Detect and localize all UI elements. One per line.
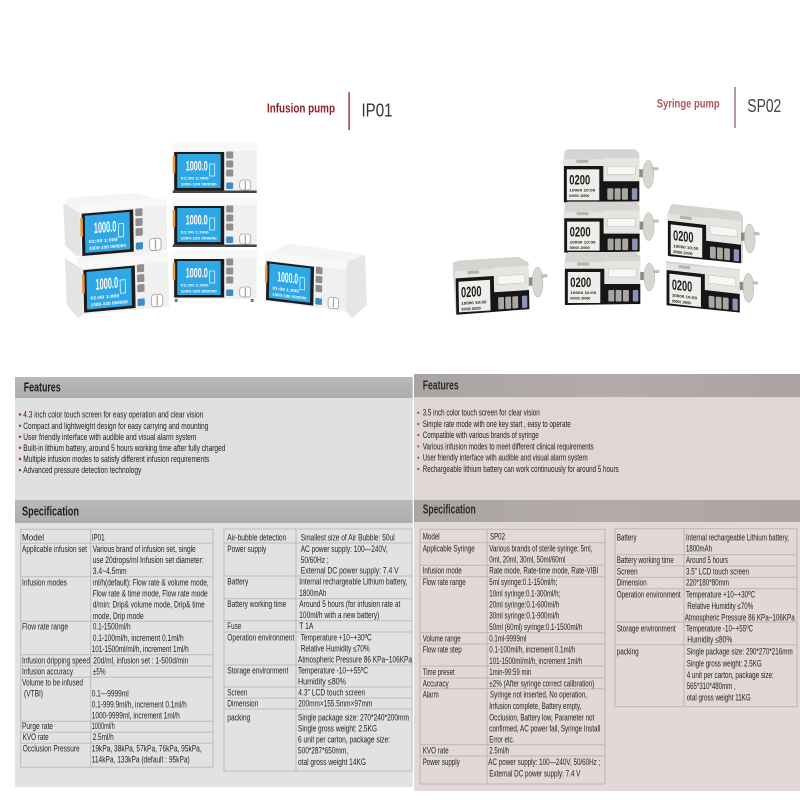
table: IP01 left: Model bbox=[22, 532, 44, 542]
table: IP01 right: Screen bbox=[227, 688, 247, 698]
table: SP02 right: Single gross weight: 2.5KG bbox=[687, 658, 762, 668]
table: SP02 left: confirmed, AC power fail, Syringe Install bbox=[489, 724, 600, 734]
table: SP02 right bbox=[615, 529, 797, 707]
table: SP02 left: 0ml, 20ml, 30ml, 50ml/60ml bbox=[489, 554, 565, 564]
table: IP01 left: 114kPa, 133kPa (default : 95kPa) bbox=[92, 755, 190, 765]
syringe pump: centre bottom: 0200 bbox=[570, 274, 591, 290]
table: IP01 right: 6 unit per carton, package size: bbox=[298, 735, 390, 745]
table: IP01 left: Flow rate range bbox=[22, 622, 68, 632]
pump: left lower: 1000.0 bbox=[95, 274, 118, 294]
table: IP01 left: 1000ml/h bbox=[92, 721, 115, 731]
table: IP01 right: Temperature -10~+55ºC bbox=[298, 666, 368, 676]
pump: centre middle: 1000-100 000000 bbox=[181, 236, 218, 240]
pump: left upper: 1000.0 bbox=[94, 219, 117, 237]
pump: centre top: 1000-100 000000 bbox=[181, 182, 218, 186]
table: IP01 left: Infusion modes bbox=[22, 577, 67, 587]
table: IP01 left: Applicable infusion set bbox=[22, 544, 87, 554]
table: IP01 right: 50/60Hz ; bbox=[301, 555, 329, 565]
table: SP02 left: Infusion mode bbox=[423, 566, 462, 576]
table: SP02 left: Syringe not inserted, No operation, bbox=[490, 690, 587, 700]
pump: left lower: 1000-100 000000 bbox=[91, 299, 128, 308]
table: SP02 right: packing bbox=[617, 647, 639, 657]
heading: specification: Specification bbox=[423, 502, 476, 516]
pump: right angled bbox=[265, 243, 367, 318]
table: SP02 left: 5ml syringe:0.1-150ml/h; bbox=[489, 577, 557, 587]
title: infusion pump IP01 bbox=[267, 92, 392, 130]
syringe pump: right lower: 00000 J0000 bbox=[672, 299, 691, 306]
table: IP01 left: 0.1---9999ml bbox=[92, 689, 129, 699]
table: IP01 left: 1000-9999ml, increment 1ml/h bbox=[92, 710, 180, 720]
table: SP02 right: Around 5 hours bbox=[686, 555, 728, 565]
table: SP02 left: Various brands of sterile syringe: 5ml, bbox=[489, 543, 592, 553]
syringe pump: right upper: 10000 10:00 bbox=[673, 244, 698, 251]
title: infusion pump IP01: Infusion pump bbox=[267, 102, 335, 116]
table: SP02 right: 220*180*80mm bbox=[686, 578, 729, 588]
table: IP01 right: Dimension bbox=[227, 699, 258, 709]
pump: centre middle: 01:00 1:000 bbox=[181, 229, 210, 234]
table: SP02 right: 1800mAh bbox=[686, 544, 712, 554]
pump: centre bottom bbox=[173, 250, 257, 302]
table: SP02 left: Infusion complete, Battery empty, bbox=[489, 701, 581, 711]
feature list: Rechargeable lithium battery can work continuously for around 5 hours bbox=[423, 464, 619, 475]
table: SP02 left: Applicable Syringe bbox=[423, 543, 475, 553]
table: IP01 right: Around 5 hours (for infusion rate at bbox=[299, 599, 401, 609]
table: SP02 left: SP02 bbox=[490, 532, 505, 542]
table: IP01 right: Battery working time bbox=[227, 599, 286, 609]
title: syringe pump SP02: SP02 bbox=[747, 96, 781, 116]
table: IP01 right: External DC power supply: 7.4 V bbox=[301, 566, 399, 576]
heading: features: Features bbox=[24, 380, 61, 394]
table: SP02 right: Humidity ≤80% bbox=[687, 634, 732, 644]
table: SP02 right: Temperature -10~+55ºC bbox=[686, 623, 753, 633]
syringe pump: centre bottom: 10000 10:00 bbox=[570, 291, 596, 295]
table: IP01 right: Battery bbox=[227, 577, 249, 587]
pump: centre bottom: 1000.0 bbox=[186, 265, 208, 281]
table: IP01 left: IP01 bbox=[92, 532, 105, 542]
table: SP02 left: AC power supply: 100—240V, 50/60Hz ; bbox=[488, 757, 600, 767]
table: IP01 left: 20d/ml, infusion set : 1-500d/min bbox=[93, 655, 188, 665]
table: IP01 left: Flow rate & time mode, Flow rate mode bbox=[93, 589, 208, 599]
table: SP02 left: 10ml syringe:0.1-300ml/h; bbox=[489, 588, 560, 598]
table: IP01 left: Volume to be infused bbox=[22, 677, 83, 687]
syringe pump: centre middle: 00000 J0000 bbox=[570, 246, 590, 250]
table: SP02 left: Error etc. bbox=[489, 734, 514, 744]
table: IP01 right: Atmospheric Pressure 86 KPa~106KPa bbox=[298, 654, 412, 664]
table: SP02 left: Volume range bbox=[423, 633, 461, 643]
table: SP02 left: Occlusion, Battery low, Parameter not bbox=[489, 712, 595, 722]
syringe pump: centre top: 10000 10:00 bbox=[569, 188, 595, 192]
table: SP02 left bbox=[420, 529, 605, 784]
table: SP02 right: otal gross weight 11KG bbox=[687, 692, 751, 702]
syringe pump: centre middle: 10000 10:00 bbox=[570, 241, 596, 245]
table: IP01 left: 2.5ml/h bbox=[93, 732, 114, 742]
table: SP02 left: Alarm bbox=[423, 690, 439, 700]
table: IP01 left bbox=[21, 529, 213, 767]
table: SP02 left: 50ml (60ml) syringe:0.1-1500ml/h bbox=[489, 622, 582, 632]
feature list: User friendly interface with audible and visual alarm system bbox=[23, 432, 196, 443]
syringe pump: right upper: 00000 J0000 bbox=[673, 250, 693, 256]
table: SP02 right: Battery bbox=[617, 533, 637, 543]
table: SP02 right: 3.5" LCD touch screen bbox=[686, 566, 749, 576]
title: syringe pump SP02 bbox=[657, 87, 781, 128]
table: SP02 right: Operation environment bbox=[617, 590, 681, 600]
table: IP01 right: 4.3" LCD touch screen bbox=[298, 688, 365, 698]
table: IP01 right: 500*287*650mm, bbox=[298, 746, 348, 756]
syringe pump: right upper: 0200 bbox=[673, 227, 694, 246]
table: IP01 left: Infusion accuracy bbox=[22, 666, 73, 676]
table: IP01 left: ±5% bbox=[93, 666, 106, 676]
feature list: 4.3 inch color touch screen for easy operation and clear vision bbox=[23, 410, 203, 420]
table: IP01 right: Single gross weight: 2.5KG bbox=[298, 724, 377, 734]
heading: specification: Specification bbox=[22, 504, 79, 518]
table: IP01 left: use 20drops/ml Infusion set diameter: bbox=[93, 555, 204, 565]
table: IP01 right: 1800mAh bbox=[299, 588, 326, 598]
feature list bbox=[23, 410, 225, 476]
table: IP01 right: Power supply bbox=[227, 544, 267, 554]
table: IP01 right: 100ml/h with a new battery) bbox=[299, 610, 379, 620]
syringe pump: far left: 10000 10:00 bbox=[461, 300, 487, 306]
table: IP01 left: mode, Drip mode bbox=[93, 611, 144, 621]
syringe pump: right lower: 10000 10:00 bbox=[672, 294, 697, 301]
table: IP01 right: Internal rechargeable Lithium battery, bbox=[299, 577, 407, 587]
table: IP01 right: T 1A bbox=[299, 621, 313, 631]
table: IP01 right: AC power supply: 100—240V, bbox=[301, 544, 388, 554]
feature list: Multiple infusion modes to satisfy different infusion requirements bbox=[23, 454, 209, 465]
pump: right angled: 1000-100 000000 bbox=[272, 292, 307, 301]
table: IP01 left: 101-1500ml/ml/h, increment 1ml/h bbox=[92, 644, 189, 654]
table: IP01 right: 200mm×155.5mm×97mm bbox=[298, 699, 372, 709]
table: IP01 left: ml/h(default): Flow rate & volume mode, bbox=[93, 577, 209, 587]
table: SP02 left: Flow rate range bbox=[423, 577, 466, 587]
feature list: Simple rate mode with one key start , easy to operate bbox=[423, 419, 571, 430]
table: IP01 left: 0.1-1500ml/h bbox=[93, 622, 131, 632]
table: SP02 left: 20ml syringe:0.1-600ml/h bbox=[489, 599, 559, 609]
table: IP01 left: Various brand of infusion set, single bbox=[93, 544, 196, 554]
table: IP01 left: d/min: Drip& volume mode, Drip& time bbox=[93, 600, 205, 610]
table: SP02 left: 101-1500ml/ml/h, increment 1ml/h bbox=[489, 656, 582, 666]
heading: features: Features bbox=[423, 378, 459, 392]
table: SP02 right: Relative Humidity ≤70% bbox=[687, 601, 753, 611]
pump: right angled: 01:00 1:000 bbox=[272, 285, 300, 294]
feature list: Advanced pressure detection technology bbox=[23, 465, 141, 476]
feature list: Built-in lithium battery, around 5 hours working time after fully charged bbox=[23, 443, 225, 454]
product photo: six infusion pumps bbox=[63, 143, 367, 318]
table: SP02 right: Temperature +10~+30ºC bbox=[686, 590, 755, 600]
syringe pump: far left: 00000 J0000 bbox=[461, 306, 481, 312]
table: IP01 right: packing bbox=[227, 712, 250, 722]
table: SP02 left: Flow rate step bbox=[423, 645, 462, 655]
table: SP02 left: Model bbox=[423, 532, 440, 542]
feature list: Compatible with various brands of syringe bbox=[423, 430, 539, 441]
product photo: six syringe pumps bbox=[453, 149, 759, 316]
syringe pump: centre top bbox=[563, 149, 658, 203]
pump: centre top bbox=[173, 143, 257, 193]
syringe pump: centre bottom bbox=[564, 252, 659, 305]
table: IP01 left: (VTBI) bbox=[24, 689, 43, 699]
table: SP02 left: 30ml syringe:0.1-900ml/h bbox=[489, 611, 559, 621]
table: IP01 right: Temperature +10~+30ºC bbox=[301, 632, 372, 642]
table: IP01 left: 0.1-100ml/h, increment 0.1ml/h bbox=[93, 633, 184, 643]
table: IP01 right: Humidity ≤80% bbox=[298, 677, 346, 687]
panel: IP01 features bbox=[15, 377, 413, 500]
syringe pump: centre top: 00000 J0000 bbox=[569, 194, 589, 198]
pump: centre middle: 1000.0 bbox=[186, 212, 208, 228]
title: infusion pump IP01: IP01 bbox=[362, 100, 392, 120]
table: SP02 right: Battery working time bbox=[617, 555, 674, 565]
table: SP02 right: Storage environment bbox=[617, 623, 676, 633]
title: syringe pump SP02: Syringe pump bbox=[657, 96, 720, 110]
table: IP01 right: Single package size: 270*240*200mm bbox=[298, 712, 409, 722]
pump: centre middle bbox=[173, 197, 257, 247]
pump: left lower: 01:00 1:000 bbox=[90, 293, 120, 301]
pump: left upper bbox=[63, 193, 167, 258]
syringe pump: centre middle bbox=[564, 202, 659, 253]
table: SP02 left: 0.1-100ml/h, increment 0.1ml/h bbox=[489, 645, 575, 655]
table: IP01 right: Fuse bbox=[227, 621, 241, 631]
syringe pump: right upper bbox=[667, 203, 759, 266]
syringe pump: centre bottom: 00000 J0000 bbox=[570, 296, 590, 300]
syringe pump: centre top: 0200 bbox=[569, 171, 590, 187]
table: SP02 left: Time preset bbox=[423, 667, 455, 677]
syringe pump: far left: 0200 bbox=[461, 284, 482, 302]
table: IP01 left: Occlusion Pressure bbox=[23, 743, 80, 753]
feature list: Compact and lightweight design for easy carrying and mounting bbox=[23, 421, 208, 432]
feature list bbox=[423, 408, 619, 475]
table: SP02 left: ±2% (After syringe correct calibration) bbox=[489, 678, 594, 688]
table: SP02 right: Screen bbox=[617, 566, 638, 576]
table: SP02 left: 1min-99:59 min bbox=[489, 667, 531, 677]
table: SP02 left: Power supply bbox=[423, 757, 460, 767]
table: IP01 right: Relative Humidity ≤70% bbox=[301, 643, 370, 653]
table: IP01 right: Operation environment bbox=[227, 632, 295, 642]
table: IP01 left: 3.4~4.5mm bbox=[93, 566, 127, 576]
table: IP01 left: 19kPa, 38kPa, 57kPa, 76kPa, 95kPa, bbox=[92, 743, 202, 753]
pump: centre bottom: 01:00 1:000 bbox=[181, 282, 210, 287]
syringe pump: right lower bbox=[666, 261, 758, 316]
table: IP01 right: otal gross weight 14KG bbox=[298, 757, 366, 767]
panel: SP02 features bbox=[414, 374, 800, 500]
table: SP02 left: Accuracy bbox=[423, 678, 449, 688]
pump: left upper: 1000-100 000000 bbox=[89, 243, 127, 251]
pump: centre top: 01:00 1:000 bbox=[181, 175, 210, 180]
panel: IP01 specification bbox=[15, 500, 413, 787]
syringe pump: centre middle: 0200 bbox=[570, 224, 591, 240]
table: SP02 left: External DC power supply: 7.4 V bbox=[489, 768, 580, 778]
table: SP02 left: Rate mode, Rate-time mode, Rate-VIBI bbox=[489, 566, 598, 576]
pump: left upper: 01:00 1:000 bbox=[89, 237, 118, 244]
bullets bbox=[417, 412, 419, 470]
table: SP02 left: 2.5ml/h bbox=[489, 746, 509, 756]
table: IP01 left: Infusion dripping speed bbox=[22, 655, 90, 665]
pump: right angled: 1000.0 bbox=[277, 269, 298, 287]
table: SP02 left: 0.1ml-9999ml bbox=[489, 633, 526, 643]
table: SP02 right: Dimension bbox=[617, 578, 647, 588]
feature list: Various infusion modes to meet different clinical requirements bbox=[423, 441, 594, 452]
table: IP01 right: Storage environment bbox=[227, 666, 289, 676]
table: IP01 left: 0.1-999.9ml/h, increment 0.1ml/h bbox=[92, 700, 187, 710]
feature list: 3.5 inch color touch screen for clear vision bbox=[423, 408, 540, 419]
pump: centre top: 1000.0 bbox=[186, 158, 208, 174]
table: IP01 right: Smallest size of Air Bubble: 50ul bbox=[301, 533, 395, 543]
syringe pump: right lower: 0200 bbox=[672, 276, 692, 295]
table: IP01 left: KVO rate bbox=[23, 732, 49, 742]
pump: left lower bbox=[65, 252, 169, 318]
panel: SP02 specification bbox=[414, 500, 800, 791]
feature list: User friendly interface with audible and visual alarm system bbox=[423, 453, 588, 464]
table: IP01 left: Purge rate bbox=[22, 721, 53, 731]
table: IP01 right bbox=[224, 529, 412, 771]
bullets bbox=[19, 413, 21, 471]
table: SP02 left: KVO rate bbox=[423, 746, 449, 756]
pump: centre bottom: 1000-100 000000 bbox=[181, 288, 218, 294]
syringe pump: far left bbox=[453, 255, 548, 315]
table: IP01 right: Air-bubble detection bbox=[227, 533, 286, 543]
table: SP02 right: 565*310*480mm , bbox=[687, 681, 736, 691]
